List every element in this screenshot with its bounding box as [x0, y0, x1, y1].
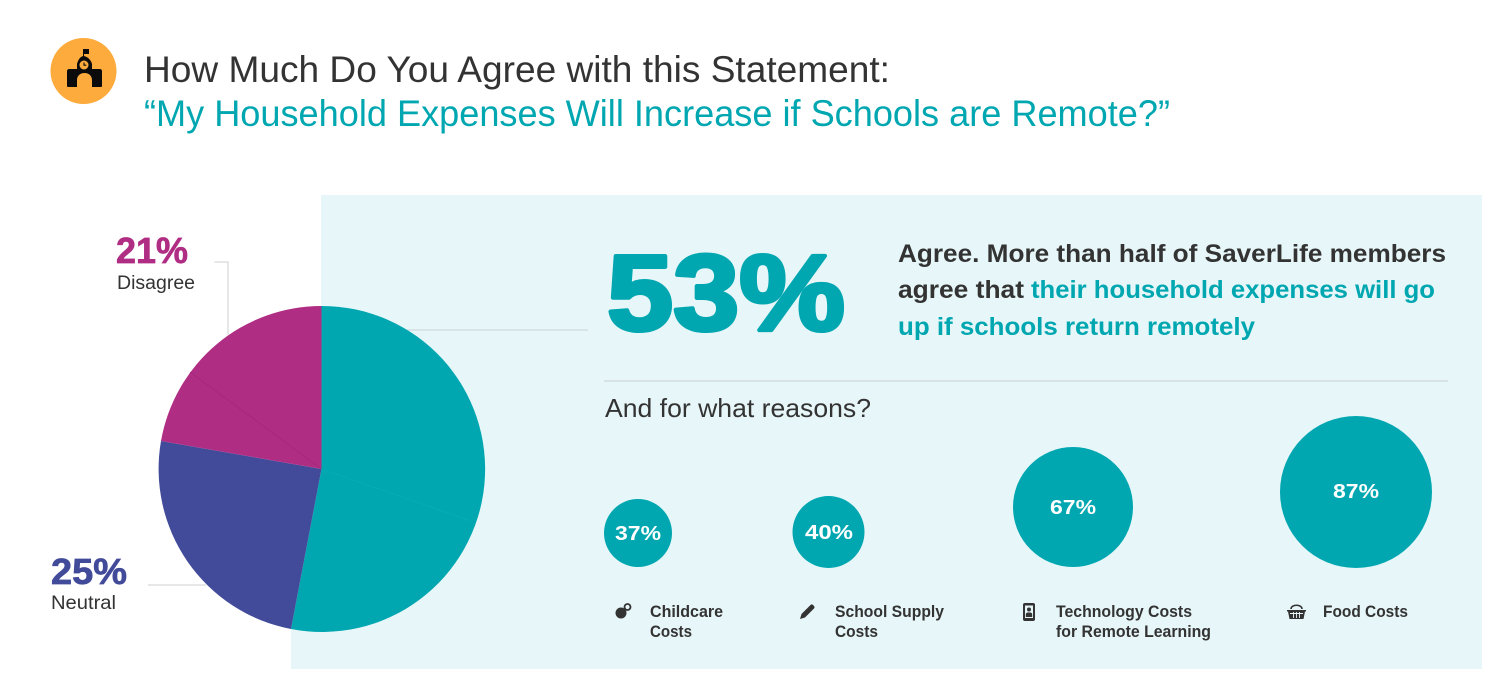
statement text [898, 240, 1446, 341]
label: neutral 25%: 25% [51, 551, 127, 592]
caption: food: Food Costs [1323, 603, 1408, 621]
statement text: up if schools return remotely [898, 313, 1255, 341]
big stat: 53%: 53% [607, 232, 845, 353]
pie chart [159, 306, 485, 632]
caption: school supply: Costs [835, 623, 878, 641]
bubble: food 87% [1280, 416, 1432, 568]
icon: tablet [1023, 603, 1035, 621]
icon: pacifier [616, 604, 630, 618]
panel: agree background [291, 195, 1482, 669]
bubble: childcare 37%: 37% [615, 523, 661, 545]
bubble: childcare 37% [604, 499, 672, 567]
bubble: technology 67%: 67% [1050, 497, 1096, 519]
caption: childcare [650, 603, 723, 641]
caption: childcare: Childcare [650, 603, 723, 621]
bubble: school supply 40%: 40% [805, 522, 853, 544]
title: “My Household Expenses Will Increase if Schools are Remote?” [144, 93, 1170, 134]
caption: technology [1056, 603, 1211, 641]
label: disagree 21% [116, 230, 195, 294]
icon: pencil [800, 604, 815, 619]
title: How Much Do You Agree with this Statement: [144, 49, 890, 90]
label: neutral 25%: Neutral [51, 593, 116, 614]
bubble: technology 67% [1013, 447, 1133, 567]
caption: technology: Technology Costs [1056, 603, 1192, 621]
caption: school supply: School Supply [835, 603, 945, 621]
icon: basket [1287, 605, 1306, 619]
leader line: agree [321, 329, 588, 331]
subheading: And for what reasons? [605, 393, 871, 423]
statement text: Agree. More than half of SaverLife members [898, 240, 1446, 268]
statement text: agree that [898, 276, 1025, 304]
bubble: food 87%: 87% [1333, 481, 1379, 503]
caption: school supply [835, 603, 945, 641]
icon: school [50, 38, 116, 104]
leader line: neutral [148, 584, 206, 586]
statement text: their household expenses will go [1031, 276, 1435, 304]
label: disagree 21%: 21% [116, 230, 188, 271]
caption: technology: for Remote Learning [1056, 623, 1211, 641]
caption: childcare: Costs [650, 623, 692, 641]
label: disagree 21%: Disagree [117, 273, 195, 294]
leader line: disagree [214, 262, 228, 335]
title [144, 49, 1170, 134]
bubble: school supply 40% [792, 496, 864, 568]
label: neutral 25% [51, 551, 127, 614]
